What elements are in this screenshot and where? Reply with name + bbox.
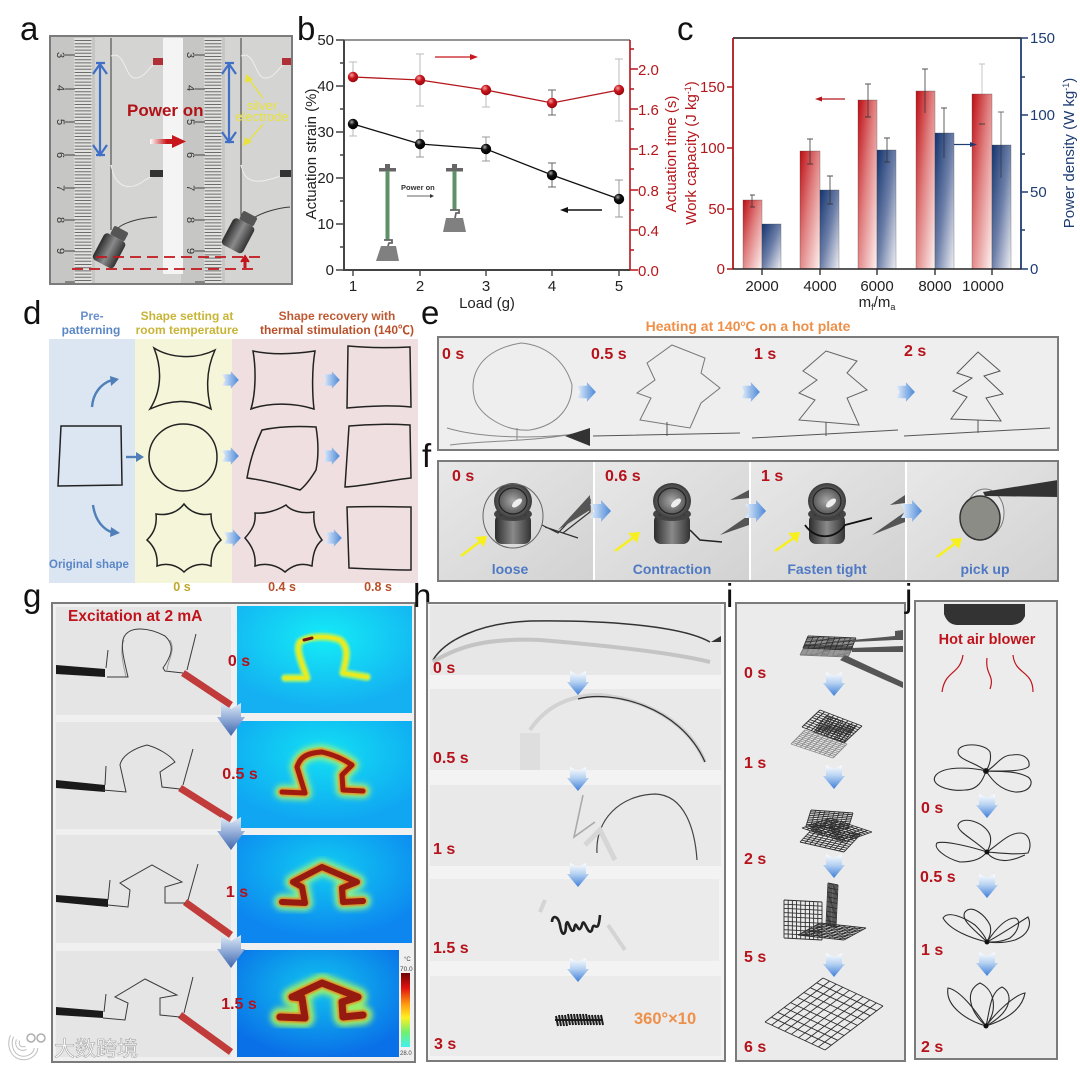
axis title: power density: Power density (W kg	[1061, 91, 1078, 228]
time labels: 0 s	[442, 346, 464, 363]
time labels: 0 s	[433, 660, 455, 677]
panel label e: e	[421, 294, 439, 331]
panel b: actuation strain and time chart: Load (g)	[459, 295, 515, 312]
step captions: Fasten tight	[787, 561, 867, 577]
left tick labels: 0	[326, 262, 334, 279]
right tick labels: 1.6	[638, 102, 659, 119]
time labels: 0.6 s	[605, 468, 641, 485]
row 3 s	[430, 976, 721, 1056]
right tick labels: 0	[1030, 261, 1038, 278]
label: Power on: Power on	[127, 101, 204, 120]
label: hot air blower: Hot air blower	[939, 632, 1036, 648]
right tick labels: 0.0	[638, 263, 659, 280]
ruler left: 6	[54, 152, 66, 158]
panel label f: f	[422, 437, 432, 474]
set shapes column	[147, 348, 221, 572]
x tick labels: 3	[482, 278, 490, 295]
x axis title: m	[859, 294, 871, 311]
chevrons	[976, 794, 998, 976]
axis title: power density: )	[1061, 78, 1078, 83]
state 0.5 s	[593, 345, 740, 436]
row 1 s	[430, 785, 721, 866]
watermark	[10, 1034, 138, 1061]
label: original shape: Original shape	[49, 559, 129, 571]
ruler right	[184, 38, 222, 283]
time labels: 0 s	[921, 800, 943, 817]
right tick labels: 100	[1030, 107, 1055, 124]
panel c: work capacity and power density bar chart	[683, 30, 1078, 312]
time labels: 1 s	[761, 468, 783, 485]
ruler left: 3	[54, 52, 66, 58]
colour bar	[400, 957, 413, 1057]
column headers: Shape recovery with	[279, 309, 395, 323]
row 0 s	[430, 605, 721, 675]
0.8 s shapes column	[345, 346, 411, 570]
curved arrows	[92, 380, 138, 533]
time labels: 3 s	[434, 1036, 456, 1053]
black series	[348, 119, 624, 204]
panel d: shape recovery columns	[49, 309, 418, 594]
panel b: actuation strain and time chart	[303, 32, 680, 312]
ruler left: 5	[54, 119, 66, 125]
axes	[727, 38, 1028, 275]
panel label d: d	[23, 294, 41, 331]
ruler right: 8	[184, 217, 196, 223]
x tick labels: 6000	[860, 278, 894, 295]
mesh 2 s	[800, 810, 872, 852]
panel label i: i	[726, 577, 733, 614]
x tick labels: 5	[615, 278, 623, 295]
x tick labels: 2	[416, 278, 424, 295]
colour bar: 28.0	[400, 1051, 412, 1057]
right tick labels: 0.8	[638, 183, 659, 200]
arrow heads	[110, 376, 144, 537]
x axis title: a	[890, 302, 895, 312]
chevrons	[577, 382, 915, 402]
time labels: 0.5 s	[920, 869, 956, 886]
time labels: 1 s	[754, 346, 776, 363]
column headers: patterning	[62, 323, 120, 337]
time labels	[221, 653, 258, 1013]
weight pick up	[960, 480, 1058, 540]
ruler right: 9	[184, 248, 196, 254]
weight contraction	[653, 483, 749, 544]
label: silver electrode: electrode	[235, 109, 289, 124]
panel f: weight pick-up sequence	[438, 461, 1058, 581]
series arrows	[435, 54, 602, 213]
time labels: 0 s	[452, 468, 474, 485]
x axis title: f	[871, 302, 874, 312]
row 1.5 s	[430, 879, 719, 961]
inset schematic	[376, 164, 466, 261]
panel label h: h	[413, 577, 431, 614]
panel i: mesh deployment sequence	[736, 603, 905, 1061]
label: silver electrode	[235, 74, 289, 146]
panel g: electrical excitation and thermal images	[52, 603, 415, 1062]
left tick labels: 10	[317, 216, 334, 233]
time labels: 0 s	[744, 665, 766, 682]
panel h: spring coiling sequence	[427, 603, 725, 1061]
mesh 0 s with tweezers	[800, 630, 903, 688]
title: heating: o	[741, 319, 746, 328]
time labels: 2 s	[904, 343, 926, 360]
right tick labels	[1030, 30, 1055, 278]
wires and electrodes	[111, 38, 292, 230]
x axis title: /m	[874, 294, 890, 311]
weights	[91, 210, 258, 270]
right tick labels	[638, 62, 659, 280]
column headers: room temperature	[136, 323, 239, 337]
error bars	[750, 64, 1004, 207]
time labels: 1 s	[226, 884, 248, 901]
title: heating: Heating at 140	[646, 318, 741, 334]
colour bar: °C	[404, 957, 411, 963]
label: silver electrode: silver	[247, 98, 278, 113]
title: heating: C on a hot plate	[745, 318, 851, 334]
chevrons	[823, 672, 845, 977]
x tick labels: 8000	[918, 278, 952, 295]
step captions	[492, 561, 1010, 577]
panel label c: c	[677, 10, 694, 47]
row 0.5 s	[56, 721, 412, 829]
panel b: actuation strain and time chart: Actuation time (s)	[663, 96, 680, 212]
flower 0.5 s	[936, 820, 1030, 862]
left tick labels: 20	[317, 170, 334, 187]
weight loose	[483, 483, 590, 548]
chevrons	[590, 500, 922, 522]
row 1.5 s	[56, 950, 399, 1057]
0.4 s shapes column	[245, 351, 322, 572]
time labels	[744, 665, 766, 1056]
right tick labels: 2.0	[638, 62, 659, 79]
right tick labels: 150	[1030, 30, 1055, 47]
inset schematic: Power on	[401, 183, 435, 192]
red bars	[743, 91, 992, 269]
state 0 s	[447, 343, 590, 446]
axis title: work capacity: -1	[683, 86, 693, 94]
time labels: 0.5 s	[222, 766, 258, 783]
ruler left: 4	[54, 85, 66, 91]
panel a: photo of actuator before and after power on	[50, 36, 292, 284]
panel j: flower closing under hot air	[915, 601, 1057, 1059]
time labels: 5 s	[744, 949, 766, 966]
large chevrons	[217, 703, 245, 968]
yellow arrows	[461, 537, 957, 557]
x tick labels	[349, 278, 623, 295]
time labels: 2 s	[744, 851, 766, 868]
time labels	[442, 343, 926, 363]
x tick labels	[745, 278, 1004, 295]
left tick labels: 50	[708, 201, 725, 218]
time labels: 0.8 s	[364, 580, 392, 594]
panel label j: j	[904, 577, 912, 614]
left tick labels: 0	[717, 261, 725, 278]
time labels: 0 s	[173, 580, 191, 594]
length arrows	[93, 63, 236, 155]
blue bars	[762, 133, 1011, 269]
time labels: 0.4 s	[268, 580, 296, 594]
mesh 5 s	[784, 883, 866, 940]
ruler right: 3	[184, 52, 196, 58]
panel e: tree shape recovery	[438, 337, 1058, 450]
time labels: 1 s	[744, 755, 766, 772]
left tick labels: 40	[317, 78, 334, 95]
x tick labels: 1	[349, 278, 357, 295]
time labels: 0 s	[228, 653, 250, 670]
time labels: 1 s	[921, 942, 943, 959]
mesh 1 s	[791, 710, 862, 758]
state 2 s	[904, 352, 1050, 436]
left tick labels	[700, 79, 725, 278]
red series	[348, 72, 624, 108]
time labels: 1 s	[433, 841, 455, 858]
arrow: power on	[150, 135, 186, 148]
time labels: 1.5 s	[221, 996, 257, 1013]
axis titles: Actuation strain (%)	[303, 89, 320, 219]
column headers: thermal stimulation (140℃)	[260, 323, 414, 337]
hot air blower	[944, 604, 1025, 625]
ruler right: 4	[184, 85, 196, 91]
flower 2 s	[948, 983, 1025, 1028]
right tick labels: 50	[1030, 184, 1047, 201]
panel label g: g	[23, 577, 41, 614]
ruler right: 6	[184, 152, 196, 158]
time labels: 0.5 s	[433, 750, 469, 767]
x tick labels: 4	[548, 278, 556, 295]
column headers	[62, 309, 414, 337]
hot air lines	[942, 655, 1033, 692]
time labels	[173, 580, 392, 594]
time labels: 2 s	[921, 1039, 943, 1056]
step captions: pick up	[960, 561, 1010, 577]
column headers: Pre-	[80, 309, 104, 323]
axis title: power density: -1	[1061, 83, 1071, 91]
time labels	[452, 468, 783, 485]
ruler right: 5	[184, 119, 196, 125]
time labels: 6 s	[744, 1039, 766, 1056]
time labels: 0.5 s	[591, 346, 627, 363]
weight fasten tight	[805, 483, 905, 544]
error bars	[349, 54, 623, 217]
right tick labels: 1.2	[638, 142, 659, 159]
time labels	[920, 800, 956, 1056]
left tick labels: 30	[317, 124, 334, 141]
flower 1 s	[943, 909, 1029, 944]
x tick labels: 4000	[803, 278, 837, 295]
watermark: 大数跨境	[54, 1038, 138, 1061]
flower 0 s	[934, 745, 1031, 792]
state 1 s	[752, 351, 898, 438]
yellow arrow heads	[475, 532, 962, 549]
left tick labels: 100	[700, 140, 725, 157]
axis title: work capacity: )	[683, 81, 700, 86]
ruler left	[54, 38, 92, 283]
panel label a: a	[20, 10, 39, 47]
column headers: Shape setting at	[141, 309, 233, 323]
x tick labels: 2000	[745, 278, 779, 295]
colour bar: 70.0	[400, 966, 413, 973]
label: rotation count: 360°×10	[634, 1010, 696, 1028]
chevrons	[567, 671, 589, 982]
right tick labels: 0.4	[638, 223, 659, 240]
time labels: 1.5 s	[433, 940, 469, 957]
left tick labels: 150	[700, 79, 725, 96]
left tick labels	[317, 32, 334, 279]
mesh 6 s	[765, 978, 883, 1050]
original square shape	[58, 426, 122, 486]
dashed displacement lines	[72, 256, 264, 269]
series arrows	[815, 96, 977, 147]
time labels	[433, 660, 469, 1053]
left tick labels: 50	[317, 32, 334, 49]
x tick labels: 10000	[962, 278, 1004, 295]
heading: excitation: Excitation at 2 mA	[68, 608, 202, 625]
axis title: work capacity: Work capacity (J kg	[683, 94, 700, 225]
ruler left: 9	[54, 248, 66, 254]
panel label b: b	[297, 10, 315, 47]
step captions: loose	[492, 561, 528, 577]
arrows between shapes	[222, 371, 342, 547]
axes	[344, 40, 630, 270]
ruler left: 7	[54, 185, 66, 191]
step captions: Contraction	[633, 561, 711, 577]
row 0 s	[56, 606, 412, 715]
ruler left: 8	[54, 217, 66, 223]
row 0.5 s	[430, 689, 721, 770]
ruler right: 7	[184, 185, 196, 191]
row 1 s	[56, 835, 412, 943]
column backgrounds	[49, 339, 418, 583]
